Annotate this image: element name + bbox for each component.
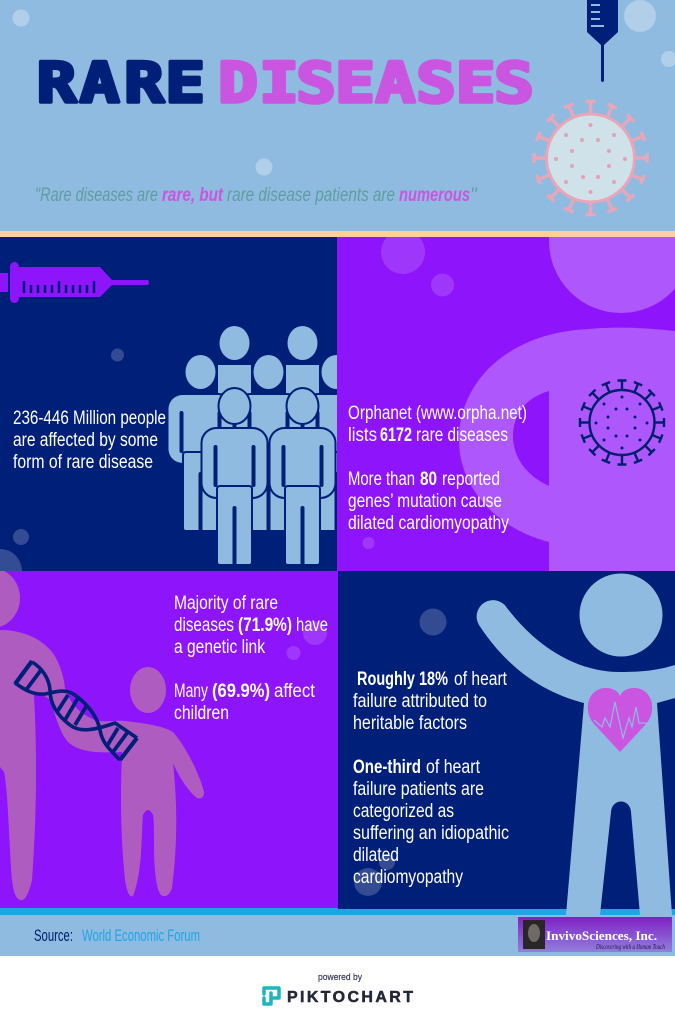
background silhouette (459, 237, 675, 571)
text: heart failure stats: One-third (353, 757, 421, 778)
text: people affected: 236-446 Million people (13, 408, 166, 429)
panel: powered by piktochart (0, 956, 675, 1024)
icon: syringe (0, 262, 149, 303)
text: orphanet stats: genes’ mutation cause (348, 491, 502, 512)
text: genetic link stats: (69.9%) (212, 681, 270, 702)
quote: " (470, 185, 478, 206)
text: heart failure stats: suffering an idiopathic (353, 823, 509, 844)
bubbles (362, 230, 454, 549)
text: heart failure stats (353, 669, 509, 888)
text: people affected (13, 408, 166, 473)
source: Source: (34, 926, 73, 945)
text: orphanet stats: lists (348, 425, 377, 446)
icon: crowd of people (168, 326, 368, 564)
text: heart failure stats: of heart (454, 669, 508, 690)
text: genetic link stats: Many (174, 681, 208, 702)
source: World Economic Forum (82, 926, 200, 945)
icon: person with raised arm (477, 574, 675, 915)
quote: rare disease patients are (227, 185, 395, 206)
text: genetic link stats: diseases (174, 615, 234, 636)
blue stripe (0, 908, 675, 915)
title: DISEASES (218, 52, 534, 116)
quote (35, 185, 478, 206)
text: genetic link stats: (71.9%) (238, 615, 292, 636)
bubbles (0, 348, 124, 593)
icon: heart with pulse (588, 688, 657, 752)
text: genetic link stats: affect (274, 681, 316, 702)
powered by: powered by (318, 972, 362, 983)
quote: numerous (399, 185, 470, 206)
icon: header virus (534, 102, 647, 214)
text: orphanet stats: 80 (420, 469, 437, 490)
text: heart failure stats: of heart (426, 757, 481, 778)
text: genetic link stats: Majority of rare (174, 593, 278, 614)
logo: InvivoSciences (518, 917, 672, 952)
text: heart failure stats: categorized as (353, 801, 454, 822)
panel: header background (0, 0, 675, 232)
text: heart failure stats: dilated (353, 845, 399, 866)
text: orphanet stats: More than (348, 469, 415, 490)
bubbles (286, 621, 327, 660)
icon: header syringe (587, 0, 618, 82)
text: people affected: form of rare disease (13, 452, 153, 473)
text: heart failure stats: heritable factors (353, 713, 467, 734)
text: heart failure stats: failure attributed to (353, 691, 487, 712)
panel: people affected (0, 237, 337, 571)
text: orphanet stats: 6172 (380, 425, 412, 446)
panel: genetic link (0, 568, 338, 908)
quote: "Rare diseases are (35, 185, 158, 206)
text: people affected: are affected by some (13, 430, 158, 451)
text: genetic link stats: a genetic link (174, 637, 265, 658)
text: genetic link stats (174, 593, 328, 724)
icon: DNA helix (15, 661, 137, 760)
bubbles (354, 608, 446, 896)
icon: navy virus (580, 380, 664, 464)
panel: orphanet (337, 237, 675, 571)
panel: footer (0, 915, 675, 956)
text: orphanet stats: dilated cardiomyopathy (348, 513, 509, 534)
title: RARE (37, 52, 205, 116)
source (34, 926, 200, 945)
text: heart failure stats: Roughly 18% (357, 669, 448, 690)
quote: rare, but (162, 185, 224, 206)
text: orphanet stats: Orphanet (www.orpha.net) (348, 403, 527, 424)
text: orphanet stats: rare diseases (416, 425, 508, 446)
text: orphanet stats (348, 403, 527, 534)
text: genetic link stats: children (174, 703, 229, 724)
peach stripe (0, 231, 675, 237)
logo: InvivoSciences: InvivoSciences, Inc. (546, 928, 657, 943)
text: heart failure stats: cardiomyopathy (353, 867, 463, 888)
icon: adult and child silhouette (0, 568, 204, 900)
icon: piktochart logo (264, 988, 279, 1004)
text: genetic link stats: have (296, 615, 328, 636)
piktochart wordmark: PIKTOCHART (287, 989, 413, 1006)
panel: heart failure (338, 571, 675, 915)
text: orphanet stats: reported (442, 469, 500, 490)
header bubbles (12, 0, 675, 176)
title (37, 52, 534, 116)
text: heart failure stats: failure patients are (353, 779, 484, 800)
